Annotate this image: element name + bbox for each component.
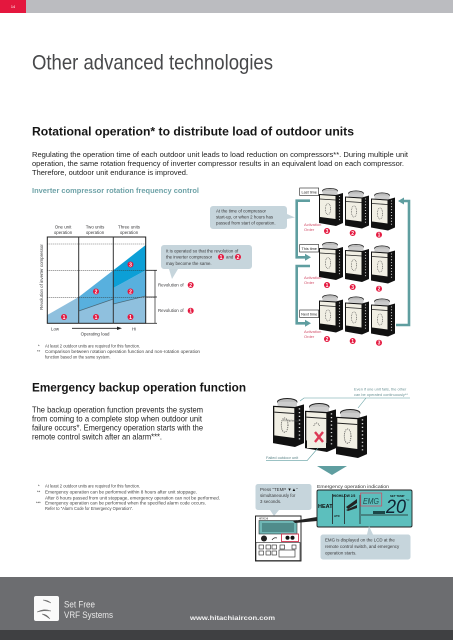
footnotes: rotational xyxy=(37,344,201,360)
footnotes: rotational: * xyxy=(38,344,40,348)
callout: press temp: 3 seconds. xyxy=(260,499,281,504)
emergency paragraph: remote control switch after an alarm***. xyxy=(32,432,162,442)
LCD panel: 20 xyxy=(385,497,406,518)
brackets: revolution of 1 and 2: Revolution of xyxy=(158,282,184,288)
LCD panel: HEAT xyxy=(318,504,333,510)
intro paragraph: Therefore, outdoor unit endurance is improved. xyxy=(32,168,188,177)
LCD panel: °C xyxy=(406,498,410,502)
footnotes: emergency: Refer to "Alarm Code for Emergency Operation". xyxy=(45,506,133,511)
callout: EMG explanation xyxy=(320,526,410,560)
LCD panel: SET TEMP xyxy=(390,494,405,498)
chart: revolution vs operating load: 1 xyxy=(63,315,66,321)
callout: inverter compressor same revolution: 1 xyxy=(220,255,223,261)
heading: emergency backup: Emergency backup operation function xyxy=(32,382,246,394)
three outdoor units with failed unit xyxy=(273,398,367,458)
subheading: inverter compressor: Inverter compressor rotation frequency control xyxy=(32,188,199,195)
chart: revolution vs operating load: operation xyxy=(54,230,73,235)
footnotes: rotational: At least 2 outdoor units are required for this function. xyxy=(45,344,140,348)
emergency paragraph: from coming to a complete stop when outdoor unit xyxy=(32,414,203,424)
row: last time: 2 xyxy=(351,231,354,237)
chart: revolution vs operating load: 1 xyxy=(129,315,132,321)
footer band xyxy=(0,577,453,640)
footnotes: emergency xyxy=(36,484,220,511)
remote control: HITACHI xyxy=(259,518,268,520)
footnotes: rotational: function based on the same system. xyxy=(45,354,111,360)
callout: press temp xyxy=(256,484,312,516)
row: next time xyxy=(300,295,395,346)
emergency paragraph: failure occurs*. Emergency operation starts with the xyxy=(32,424,203,432)
callout: other unit continues: can be operated continuously** xyxy=(354,392,408,397)
chart: revolution vs operating load: 3 xyxy=(129,262,132,268)
intro paragraph: operation, the same rotation frequency of inverter compressor results in an equivalent load on each compressor. xyxy=(32,159,404,168)
footnotes: emergency: Emergency operation can be performed when the specified alarm code occurs. xyxy=(45,500,206,506)
title: Other advanced technologies xyxy=(32,52,273,74)
row: next time: Activation xyxy=(304,329,321,334)
brackets: revolution of 1 and 2: 2 xyxy=(189,283,192,289)
callout: inverter compressor same revolution: It is operated so that the revolution of xyxy=(166,248,239,254)
LCD panel: HIGH/LOW 2/3 xyxy=(333,494,356,498)
row: next time: 1 xyxy=(351,339,354,345)
LCD panel xyxy=(293,490,412,527)
top bar xyxy=(0,0,453,13)
LCD panel: EMG xyxy=(363,496,379,506)
footnotes: rotational: Comparison between rotation operation function and non-rotation operation xyxy=(45,349,201,354)
heading: emergency operation indication: Emergency operation indication xyxy=(317,484,389,489)
callout: press temp: simultaneously for xyxy=(260,493,296,498)
chart: revolution vs operating load: Three units xyxy=(118,224,141,230)
row: next time: 3 xyxy=(378,340,381,346)
intro paragraph xyxy=(32,150,408,177)
row: this time: Order xyxy=(304,280,315,285)
callout: press temp: Press "TEMP ▼▲" xyxy=(260,487,298,492)
chart: revolution vs operating load: operation xyxy=(120,230,139,235)
logo: Set Free VRF Systems: Set Free xyxy=(64,600,95,610)
remote control xyxy=(256,516,301,561)
callout: compressor start-up: passed from start of operation. xyxy=(216,220,276,226)
footnotes: emergency: Emergency operation can be performed within 8 hours after unit stoppage. xyxy=(45,490,197,494)
footnotes: emergency: ** xyxy=(37,490,41,494)
logo: Set Free VRF Systems xyxy=(34,596,113,621)
chart: revolution vs operating load: 2 xyxy=(95,289,98,295)
label: failed outdoor unit xyxy=(266,448,318,461)
callout: EMG explanation: remote control switch, and emergency xyxy=(325,544,400,549)
rotation arrows xyxy=(297,198,409,327)
chart: revolution vs operating load: 2 xyxy=(129,289,132,295)
row: this time: 1 xyxy=(326,283,329,289)
callout: compressor start-up xyxy=(210,206,295,229)
callout: other unit continues: Even if one unit fails, the other xyxy=(354,386,407,392)
callout: compressor start-up: At the time of compressor xyxy=(216,208,267,214)
chart: revolution vs operating load: Two units xyxy=(86,224,105,230)
footnotes: rotational: ** xyxy=(37,349,41,354)
chart: revolution vs operating load xyxy=(39,224,155,336)
row: next time: 2 xyxy=(326,337,329,343)
row: this time: Activation xyxy=(304,275,321,280)
LCD panel: ATC xyxy=(334,514,341,518)
website url: www.hitachiaircon.com xyxy=(189,615,275,622)
footnotes: emergency: After 8 hours passed from unit stoppage, emergency operation can not be performed. xyxy=(45,496,220,500)
chart: revolution vs operating load: Hi xyxy=(132,326,136,332)
row: this time: This time xyxy=(301,247,317,251)
heading: rotational operation: Rotational operation* to distribute load of outdoor units xyxy=(32,126,354,138)
label: failed outdoor unit: Failed outdoor unit xyxy=(266,455,299,460)
row: last time: Last time xyxy=(301,190,317,194)
row: last time: 3 xyxy=(326,229,329,235)
chart: revolution vs operating load: 1 xyxy=(95,315,98,321)
brackets: revolution of 1 and 2: 1 xyxy=(189,308,192,314)
row: this time: 2 xyxy=(378,286,381,292)
brackets: revolution of 1 and 2: Revolution of xyxy=(158,308,184,313)
callout: inverter compressor same revolution: and xyxy=(226,254,234,260)
chart: revolution vs operating load: Revolution of inverter compressor xyxy=(39,244,44,310)
row: this time xyxy=(300,242,395,292)
callout: inverter compressor same revolution: the inverter compressor xyxy=(166,254,213,260)
footnotes: emergency: At least 2 outdoor units are required for this function. xyxy=(45,484,140,488)
row: last time: Activation xyxy=(304,222,321,227)
intro paragraph: Regulating the operation time of each outdoor unit leads to load reduction on compressors**. During multiple unit xyxy=(32,150,408,159)
callout: EMG explanation: operation starts. xyxy=(325,550,356,556)
row: last time: Order xyxy=(304,227,315,232)
chart: revolution vs operating load: Operating load xyxy=(81,332,110,336)
emergency paragraph: The backup operation function prevents the system xyxy=(32,406,203,414)
row: next time: Order xyxy=(304,334,315,339)
chart: revolution vs operating load: operation xyxy=(86,230,105,235)
row: this time: 3 xyxy=(351,285,354,291)
logo: Set Free VRF Systems: VRF Systems xyxy=(64,610,113,620)
callout: other unit continues xyxy=(300,386,410,408)
callout: inverter compressor same revolution: 2 xyxy=(237,255,240,261)
row: next time: Next time xyxy=(301,312,317,316)
chart: revolution vs operating load: One unit xyxy=(55,224,72,230)
callout: EMG explanation: EMG is displayed on the LCD at the xyxy=(325,538,395,542)
emergency paragraph xyxy=(32,406,203,442)
callout: compressor start-up: start-up, or when 2 hours has xyxy=(216,214,274,220)
footnotes: emergency: *** xyxy=(36,500,41,506)
top bar: 14 xyxy=(11,5,15,9)
chart: revolution vs operating load: Low xyxy=(51,326,60,332)
callout: inverter compressor same revolution xyxy=(161,245,252,279)
row: last time: 1 xyxy=(378,232,381,238)
brackets: revolution of 1 and 2 xyxy=(146,270,194,323)
arrow down xyxy=(317,466,347,475)
row: last time xyxy=(300,188,395,238)
footnotes: emergency: * xyxy=(38,484,40,488)
callout: inverter compressor same revolution: may become the same. xyxy=(166,261,212,266)
three outdoor units with failed unit: Compressor xyxy=(283,418,299,423)
